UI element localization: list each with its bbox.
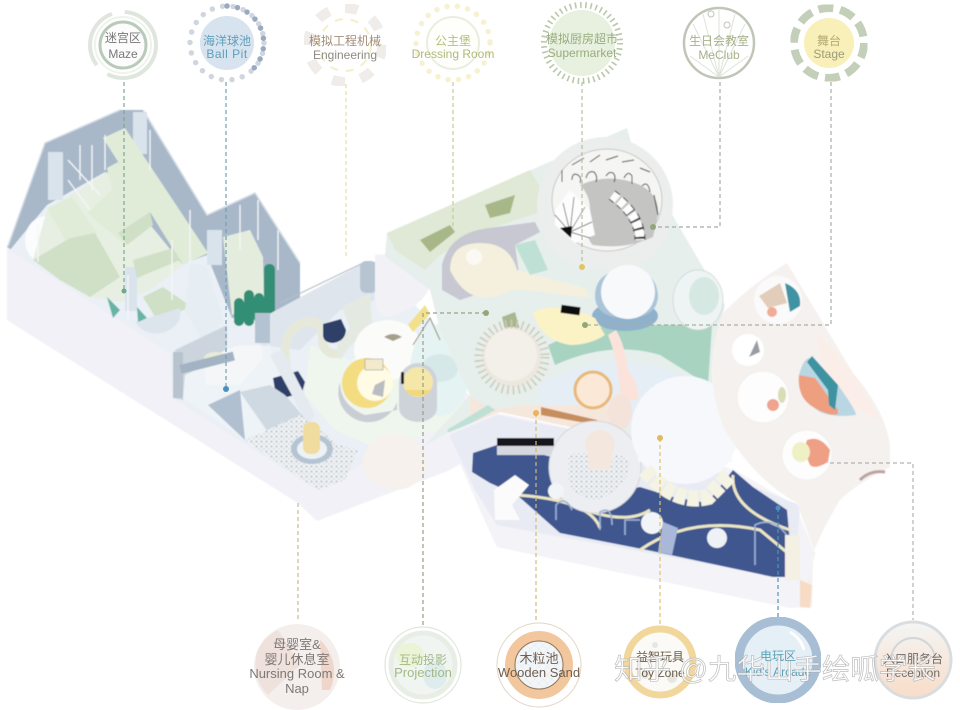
leader: stage [582,82,831,328]
map: left wing of the building [7,110,500,521]
wooden ring [575,372,611,408]
badge: ball pit: 海洋球池 [203,33,251,48]
waterfall chute [658,522,678,555]
leader: dressing room [452,82,454,228]
badge: maze: Maze [108,47,138,61]
stepped white round platform [673,270,723,330]
small white spheres [548,483,564,499]
map: lower navy carpet hall [447,376,815,608]
stairs and walkway [240,385,315,435]
vignette circle middle [737,371,789,423]
glass wall of middle room [258,262,376,350]
large white dome [631,376,739,484]
hall floor [385,128,725,445]
badge: kids arcade: 电玩区 [760,649,796,663]
pale blue ball pit floor [183,345,300,440]
maze slab base [33,172,183,302]
sand pit circle [549,421,641,513]
leader: ball pit [223,82,229,392]
badge: stage: Stage [813,47,845,61]
grey slide section [208,390,245,440]
badge: ball pit [190,6,264,80]
cream tiles on right [785,535,800,580]
badge: dressing room: 公主堡 [435,33,471,48]
wooden bench [541,407,597,425]
badge: supermarket: 模拟厨房超市 [546,31,618,46]
grey-blue back walls [7,110,300,352]
map: upper right play hall [385,128,725,445]
white curved teeth band [612,195,640,240]
round white play forms [205,345,262,385]
curved maze basin with teal [135,308,180,333]
sculpted cream arch wall [285,322,340,365]
white counter [494,475,529,520]
badge: reception [875,622,951,698]
badge: dressing room [412,6,494,80]
leader: nursing room [297,503,299,622]
yellow gate [408,305,430,332]
yellow cylinder with ring [291,422,333,464]
badge: toy zone: Toy Zone [635,666,685,680]
black arcade machines [497,438,554,455]
figure sketch on floor [384,334,402,341]
white central floor [354,320,422,380]
pale blue pool under band [540,361,700,425]
leader: wooden sand [533,410,539,625]
badge: reception: 入口服务台 [883,651,943,666]
black sign [561,305,580,315]
vignette circle top [754,276,802,324]
badge: projection: 互动投影 [399,652,447,667]
mint corner stairs [447,405,495,435]
badge: MeClub [684,8,754,78]
navy carpet [472,445,793,577]
green floor band [548,324,712,385]
black scallop arches [562,155,658,215]
maze pillars [48,112,222,311]
badge: engineering: Engineering [313,48,377,62]
badge: nursing room and nap: 母婴室& [273,637,321,652]
cream curves on carpet [517,475,790,555]
leader: reception [830,463,913,620]
navy block upper [323,319,346,343]
darker green maze slabs [33,212,180,297]
yellow round seating [338,358,397,422]
pale blue arches [556,501,790,565]
badge: toy zone [627,629,693,695]
mint stairs [515,240,548,275]
badge: kids arcade [739,621,817,699]
badge: engineering [308,8,382,82]
badge: nursing room and nap: Nap [285,681,309,696]
green-tinted play floor [305,345,470,450]
badge: wooden sand [497,623,581,707]
leader: supermarket [579,82,585,270]
badge: reception: Reception [886,666,940,680]
white maze dome [25,216,67,264]
badge: ball pit: Ball Pit [206,47,248,61]
supermarket drum [537,137,673,270]
edge detail [860,472,885,480]
cream floor under tent [470,395,630,440]
badge: MeClub: MeClub [698,48,740,62]
badge: maze [90,12,156,78]
light green maze slabs [47,128,264,320]
green slab [502,312,520,338]
spiky round tent [479,324,545,390]
badge: stage: 舞台 [817,33,841,48]
cream tile ring under dome [645,470,730,498]
green strip of shelves [387,170,545,270]
grey end wall [173,325,227,400]
cream dome with tail [450,243,590,298]
vignette small circle [732,334,764,366]
badge: stage [794,8,864,78]
pink haze of wing [815,330,880,420]
leader: maze [122,82,126,294]
maze white posts [38,130,278,320]
badge: kids arcade: Kid's Arcade [745,665,811,679]
slide beside maze [185,263,223,345]
leader lines and markers [122,82,913,625]
badge: nursing room and nap: Nursing Room & [249,666,345,681]
leader: MeClub [650,82,720,230]
badge: dressing room: Dressing Room [412,47,494,61]
leader: toy zone [657,435,663,625]
pink tube [608,330,638,400]
pale interior floor maze [10,172,460,490]
badge: projection [385,627,461,703]
badge: nursing room and nap: 婴儿休息室 [264,652,330,667]
pale round floor area [410,324,470,416]
badge: wooden sand: 木粒池 [519,651,559,666]
white tabletop with blue skirt [592,265,658,331]
navy block lower [273,371,305,397]
room interior walls [449,415,800,580]
oval pool with teal ramp [799,356,856,416]
cream dome near entrance [363,434,427,490]
badge: nursing room and nap [249,624,345,710]
pale central disc [375,254,430,318]
badge: projection: Projection [394,665,452,680]
badge: maze: 迷宫区 [105,30,141,45]
badge: supermarket: Supermarket [548,46,617,60]
leader: engineering [345,84,347,258]
badge: wooden sand: Wooden Sand [498,665,580,680]
leader: projection [423,310,489,625]
badge: supermarket [544,5,620,81]
small grey drum [399,363,437,422]
pillars of middle room [255,313,270,343]
badge: engineering: 模拟工程机械 [309,33,381,48]
teal capsules [234,264,275,326]
yellow lens table [533,307,605,345]
purple-grey arc around dome [442,222,540,300]
watermark: 知乎 @九华山手绘呱学长 [614,654,936,686]
outer white plinth of left wing [7,248,500,521]
gravel bed [245,415,358,490]
badge: toy zone: 益智玩具 [636,649,684,664]
grey ramp [179,352,235,374]
badge: MeClub: 生日会教室 [689,33,749,48]
outer white plinth of lower hall [447,413,815,608]
white cone seat [608,394,632,430]
leader: kids arcade [776,506,780,620]
fan floor [712,263,890,607]
grey spiral crescent [580,178,658,246]
front wall top face [7,248,317,521]
white fan [555,190,595,243]
map: right pale fan wing [712,263,890,608]
orange tip of wing [800,580,812,608]
vignette circle lower [782,430,832,480]
